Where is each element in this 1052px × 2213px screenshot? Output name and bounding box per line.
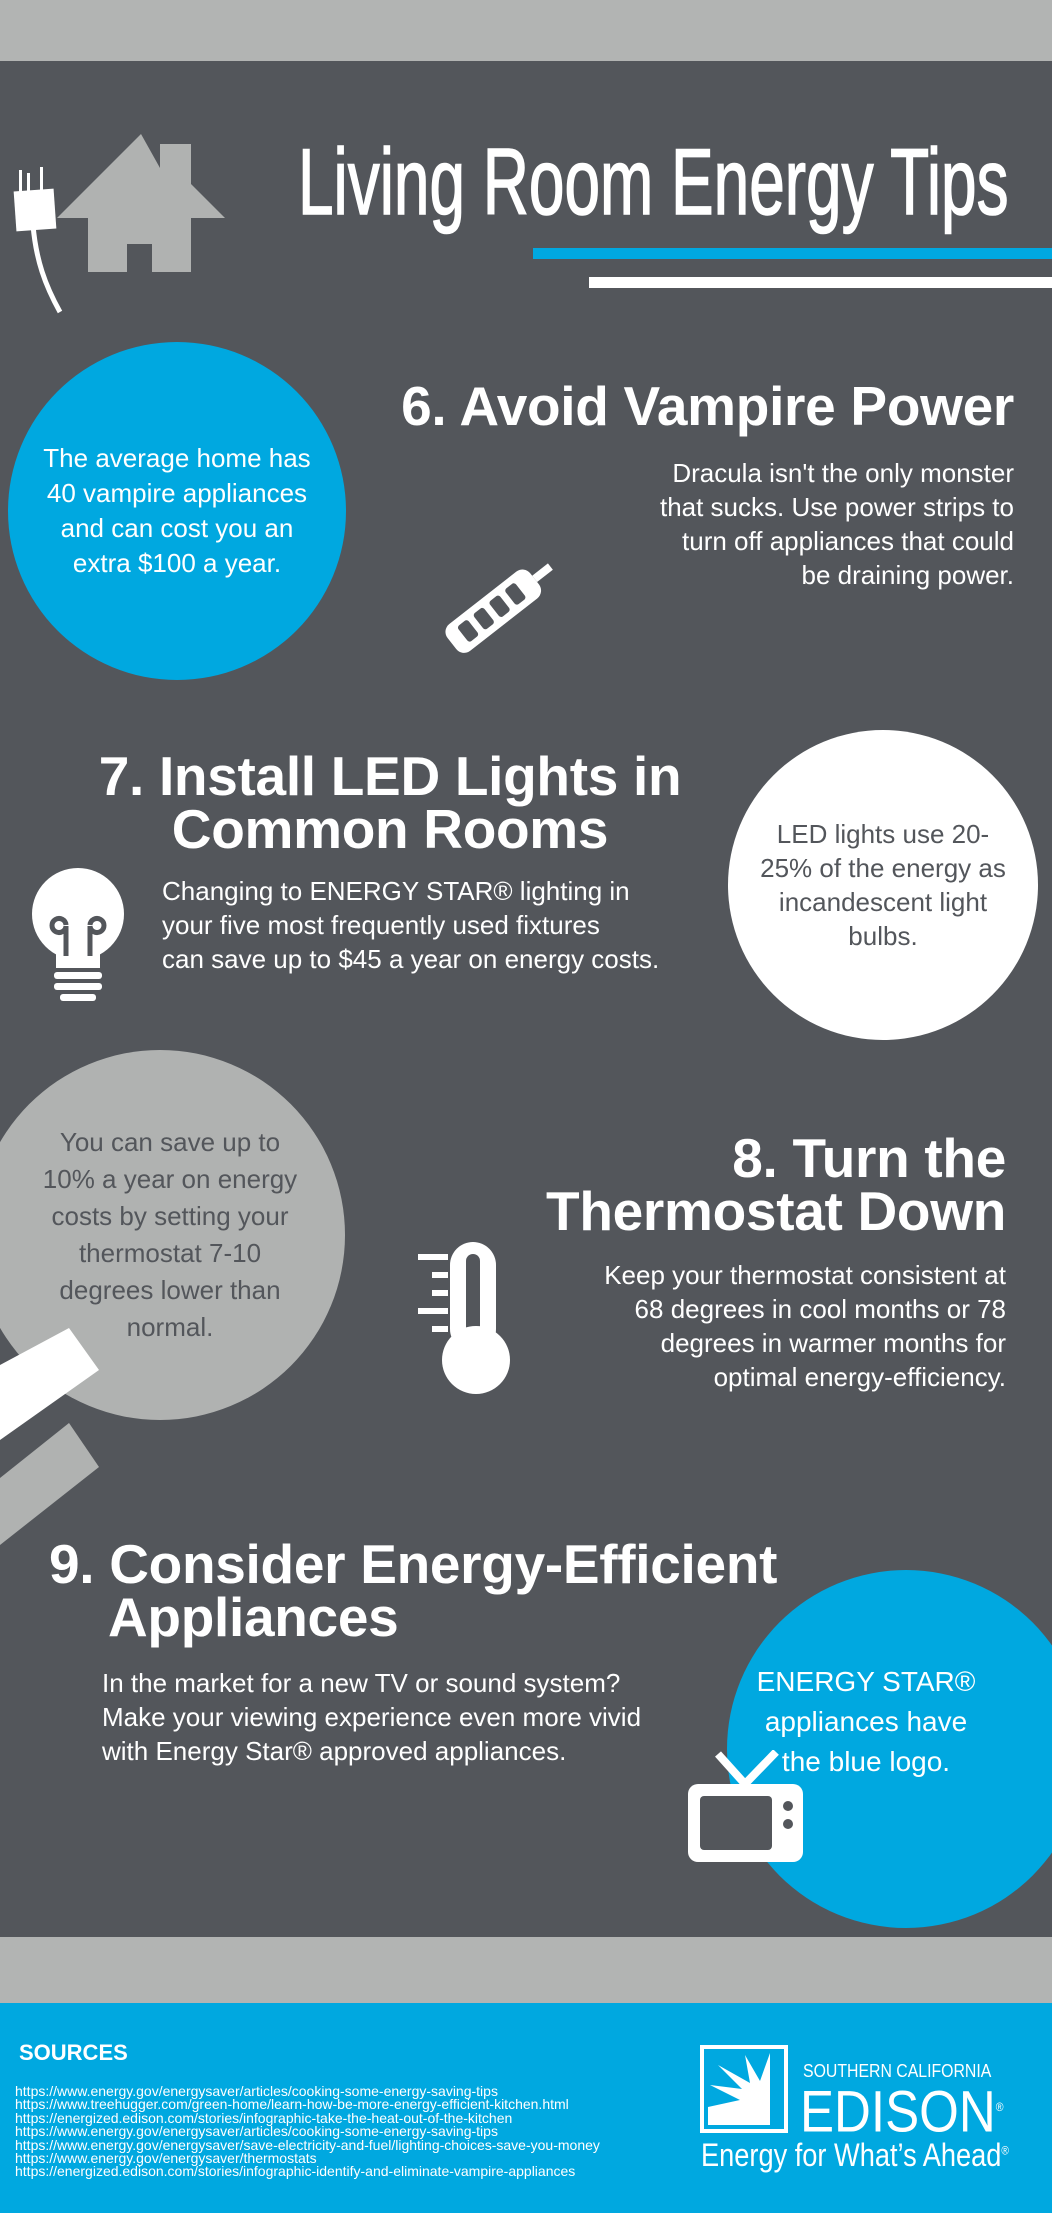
text: 8 body: optimal energy-efficiency. bbox=[714, 1362, 1006, 1392]
text: 9 body: Make your viewing experience even more vivid bbox=[102, 1702, 641, 1732]
logo: Edison: EDISON® bbox=[800, 2079, 1003, 2144]
callout: energy star circle bbox=[727, 1570, 1052, 1928]
top gray band bbox=[0, 0, 1052, 61]
heading: 9: 9. Consider Energy-Efficient bbox=[49, 1533, 777, 1595]
heading: 9 bbox=[49, 1533, 777, 1648]
text: 6 body: be draining power. bbox=[802, 560, 1014, 590]
sources list: https://www.energy.gov/energysaver/save-electricity-and-fuel/lighting-choices-save-you-money bbox=[15, 2137, 600, 2153]
text: 8 body: 68 degrees in cool months or 78 bbox=[635, 1294, 1006, 1324]
callout: thermostat savings circle: costs by setting your bbox=[51, 1201, 288, 1231]
icon: TV bbox=[688, 1750, 803, 1862]
text: 6 body: turn off appliances that could bbox=[682, 526, 1014, 556]
heading: 6: 6. Avoid Vampire Power bbox=[401, 375, 1014, 437]
sources list: https://energized.edison.com/stories/infographic-identify-and-eliminate-vampire-appliances bbox=[15, 2163, 575, 2179]
sources list bbox=[15, 2083, 600, 2179]
callout: LED circle bbox=[728, 730, 1038, 1040]
text: 7 body: Changing to ENERGY STAR® lighting in bbox=[162, 876, 630, 906]
callout: thermostat savings circle: 10% a year on energy bbox=[43, 1164, 297, 1194]
text: 9 body: with Energy Star® approved appliances. bbox=[102, 1736, 566, 1766]
callout: thermostat savings circle: degrees lower than bbox=[59, 1275, 281, 1305]
callout: thermostat savings circle bbox=[0, 1050, 345, 1420]
footer bbox=[0, 2003, 1052, 2213]
text: 6 body bbox=[660, 458, 1014, 590]
callout: vampire appliances circle: The average home has bbox=[43, 443, 311, 473]
heading: 9: Appliances bbox=[108, 1586, 398, 1648]
heading: 7: 7. Install LED Lights in bbox=[99, 745, 681, 807]
icon: light bulb bbox=[32, 868, 124, 1001]
callout: LED circle: incandescent light bbox=[779, 887, 987, 917]
callout: vampire appliances circle bbox=[8, 342, 346, 680]
heading: 7 bbox=[99, 745, 681, 860]
text: 8 body: Keep your thermostat consistent at bbox=[604, 1260, 1006, 1290]
heading: 7: Common Rooms bbox=[172, 798, 608, 860]
title underline white bbox=[589, 277, 1052, 288]
heading: 8: Thermostat Down bbox=[546, 1180, 1006, 1242]
callout: thermostat savings circle: thermostat 7-10 bbox=[79, 1238, 261, 1268]
text: 6 body: that sucks. Use power strips to bbox=[660, 492, 1014, 522]
callout: LED circle: LED lights use 20- bbox=[777, 819, 989, 849]
logo: Edison: Energy for What’s Ahead® bbox=[701, 2137, 1009, 2173]
callout: thermostat savings circle: You can save up to bbox=[60, 1127, 280, 1157]
sources list: https://www.treehugger.com/green-home/learn-how-be-more-energy-efficient-kitchen.html bbox=[15, 2096, 569, 2112]
text: 8 body bbox=[604, 1260, 1006, 1392]
callout: vampire appliances circle: 40 vampire appliances bbox=[47, 478, 307, 508]
icon: power strip bbox=[445, 563, 553, 653]
sources list: https://www.energy.gov/energysaver/articles/cooking-some-energy-saving-tips bbox=[15, 2083, 498, 2099]
sources list: https://energized.edison.com/stories/infographic-take-the-heat-out-of-the-kitchen bbox=[15, 2110, 512, 2126]
text: 7 body bbox=[162, 876, 659, 974]
decorative bars bbox=[0, 1328, 99, 1545]
text: 6 body: Dracula isn't the only monster bbox=[672, 458, 1014, 488]
callout: vampire appliances circle: extra $100 a year. bbox=[73, 548, 281, 578]
callout: thermostat savings circle: normal. bbox=[127, 1312, 213, 1342]
heading: 8 bbox=[546, 1127, 1006, 1242]
callout: vampire appliances circle: and can cost you an bbox=[61, 513, 293, 543]
text: 7 body: your five most frequently used fixtures bbox=[162, 910, 600, 940]
icon: thermometer bbox=[418, 1242, 510, 1394]
logo: Edison: SOUTHERN CALIFORNIA bbox=[803, 2061, 991, 2081]
text: 9 body: In the market for a new TV or sound system? bbox=[102, 1668, 620, 1698]
text: 7 body: can save up to $45 a year on energy costs. bbox=[162, 944, 659, 974]
logo: Edison bbox=[700, 2045, 1009, 2173]
sources heading: SOURCES bbox=[19, 2040, 128, 2065]
title underline blue bbox=[533, 248, 1052, 259]
text: 9 body bbox=[102, 1668, 641, 1766]
callout: LED circle: bulbs. bbox=[848, 921, 918, 951]
title: Living Room Energy Tips bbox=[298, 129, 1009, 234]
sources list: https://www.energy.gov/energysaver/thermostats bbox=[15, 2150, 317, 2166]
text: 8 body: degrees in warmer months for bbox=[661, 1328, 1006, 1358]
callout: LED circle: 25% of the energy as bbox=[760, 853, 1006, 883]
sources list: https://www.energy.gov/energysaver/articles/cooking-some-energy-saving-tips bbox=[15, 2123, 498, 2139]
callout: energy star circle: ENERGY STAR® appliances have the blue logo. bbox=[757, 1666, 975, 1777]
icon: house with plug bbox=[14, 134, 225, 314]
bottom gray band bbox=[0, 1937, 1052, 2003]
heading: 8: 8. Turn the bbox=[732, 1127, 1006, 1189]
